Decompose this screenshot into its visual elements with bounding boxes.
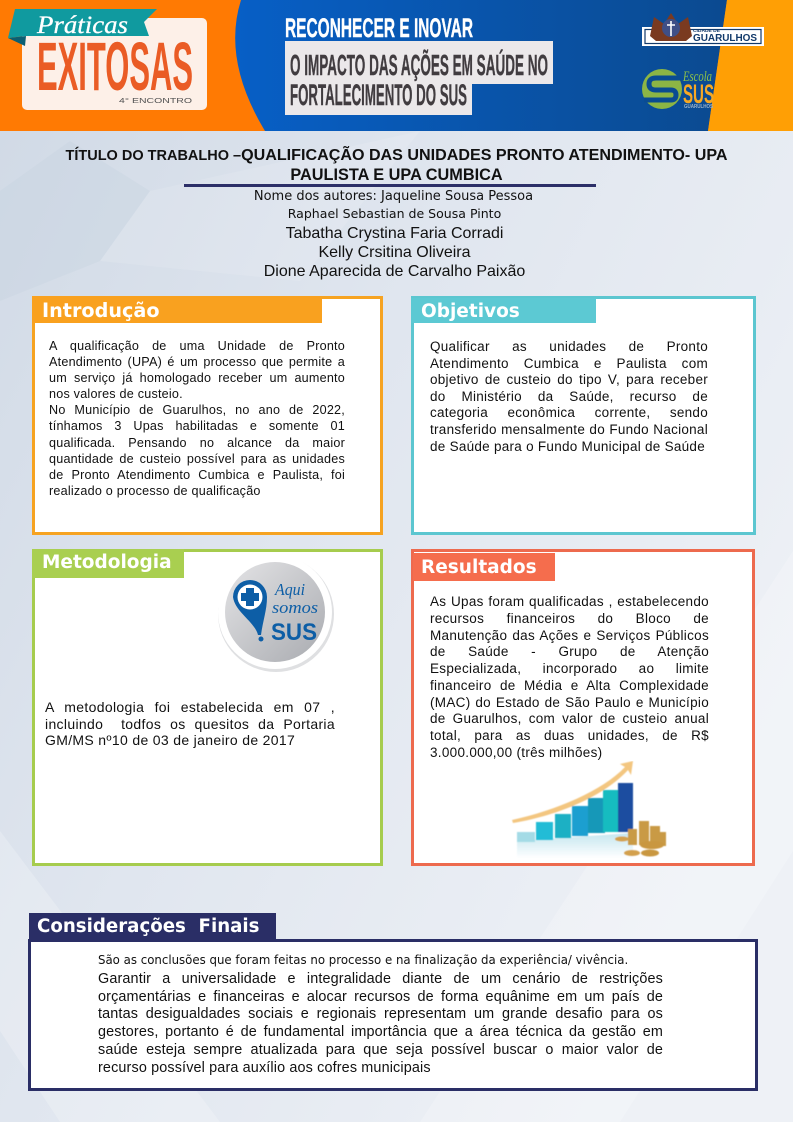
panel: objetivos [411, 296, 756, 535]
text: considerações finais: gestores, portanto é de fundamental importância que a área técnica da gestão em [98, 1024, 663, 1040]
text: resultados [430, 594, 709, 760]
text: considerações finais: São as conclusões que foram feitas no processo e na finalização da experiência/ vivência. [98, 952, 628, 967]
heading: objetivos [411, 298, 596, 323]
panel: introdução [32, 296, 383, 535]
text: resultados: 3.000.000,00 (três milhões) [430, 745, 602, 760]
text: introdução: de Pronto Atendimento Cumbica e Paulista, foi [49, 468, 345, 482]
title [65, 146, 728, 184]
event title [285, 13, 553, 115]
text: metodologia: incluindo todfos os quesitos da Portaria [45, 716, 335, 732]
icon: Aqui somos SUS: somos [272, 598, 318, 617]
logo: Práticas Exitosas [8, 9, 207, 110]
text: objetivos: Atendimento Cumbica e Paulista com [430, 356, 708, 371]
logo: Escola SUS: GUARULHOS [684, 104, 714, 110]
authors: Raphael Sebastian de Sousa Pinto [288, 207, 501, 222]
heading: resultados [413, 553, 555, 581]
text: introdução: Atendimento (UPA) é um processo que permite a [49, 355, 345, 369]
text: objetivos: do Ministério da Saúde, recurso de [430, 389, 708, 404]
text: metodologia [45, 699, 335, 748]
panel: resultados [411, 549, 755, 866]
text: introdução: realizado o processo de qualificação [49, 484, 261, 498]
text: considerações finais: orçamentárias e financeiras e alocar recursos de forma equânime em um país de [98, 989, 663, 1005]
text: resultados: As Upas foram qualificadas , estabelecendo [430, 594, 709, 609]
text: resultados: de Guarulhos, com valor de custeio anual [430, 711, 709, 726]
text: resultados: Especializada, incorporado ao limite [430, 661, 709, 676]
heading: metodologia: Metodologia [42, 552, 172, 573]
text: resultados: financeiro de Média e Alta Complexidade [430, 678, 709, 693]
text: introdução: A qualificação de uma Unidade de Pronto [49, 339, 345, 353]
logo: Práticas Exitosas: Práticas [36, 12, 128, 39]
title: TÍTULO DO TRABALHO –QUALIFICAÇÃO DAS UNIDADES PRONTO ATENDIMENTO- UPA [65, 146, 728, 164]
text: considerações finais: Garantir a universalidade e integralidade diante de um cenário de restrições [98, 971, 663, 987]
text: introdução: nos valores de custeio. [49, 387, 183, 401]
heading: introdução [32, 296, 322, 323]
event title: RECONHECER E INOVAR [285, 13, 473, 43]
logo: Escola SUS [642, 69, 714, 110]
text: metodologia: GM/MS nº10 de 03 de janeiro de 2017 [45, 732, 295, 748]
text: introdução: quantidade de custeio possível para as unidades [49, 452, 345, 466]
text: introdução: qualificada. Pensando no alcance da maior [49, 436, 345, 450]
text: objetivos: Qualificar as unidades de Pronto [430, 339, 708, 354]
heading: objetivos: Objetivos [421, 301, 520, 322]
text: resultados: total, para as duas unidades, de R$ [430, 728, 709, 743]
panel: considerações finais [28, 939, 758, 1091]
text: resultados: (MAC) do Estado de São Paulo e Município [430, 695, 709, 710]
text: objetivos: transferido mensalmente do Fundo Nacional [430, 422, 708, 437]
logo: Cidade de Guarulhos: CIDADE DE [693, 28, 720, 33]
heading: introdução: Introdução [42, 299, 160, 322]
text: resultados: Manutenção das Ações e Serviços Públicos [430, 628, 709, 643]
authors [254, 189, 533, 280]
heading: considerações finais: Considerações Finais [37, 916, 260, 937]
icon: Aqui somos SUS [218, 562, 334, 672]
logo: Cidade de Guarulhos: GUARULHOS [693, 32, 757, 44]
authors: Nome dos autores: Jaqueline Sousa Pessoa [254, 189, 533, 204]
header banner: EXITOSAS [37, 28, 193, 105]
header banner [0, 0, 793, 131]
logo: Práticas Exitosas: 4° ENCONTRO [119, 97, 193, 105]
text: objetivos: objetivo de custeio do tipo V, para receber [430, 372, 708, 387]
text: considerações finais [98, 952, 663, 1076]
logo: Escola SUS: Escola [682, 69, 712, 85]
icon: Aqui somos SUS: Aqui [274, 580, 305, 599]
title: PAULISTA E UPA CUMBICA [290, 166, 503, 184]
text: considerações finais: saúde esteja sempre atualizada para que seja possível buscar o maior valor de [98, 1042, 663, 1058]
text: objetivos: de Saúde para o Fundo Municipal de Saúde [430, 439, 705, 454]
text: metodologia: A metodologia foi estabelecida em 07 , [45, 699, 335, 715]
text: introdução: um serviço já homologado receber um aumento [49, 371, 345, 385]
text: introdução: tínhamos 3 Upas habilitadas e somente 01 [49, 419, 345, 433]
authors: Tabatha Crystina Faria Corradi [286, 225, 503, 242]
text: introdução [49, 339, 345, 498]
text: objetivos [430, 339, 708, 454]
text: objetivos: categoria econômica corrente, sendo [430, 405, 708, 420]
text: introdução: No Município de Guarulhos, no ano de 2022, [49, 403, 345, 417]
logo: Cidade de Guarulhos [642, 13, 764, 46]
text: considerações finais: recurso possível para auxílio aos cofres municipais [98, 1060, 431, 1076]
chart: growth bars with coins [512, 761, 667, 858]
event title: FORTALECIMENTO DO SUS [290, 79, 467, 112]
text: resultados: recursos financeiros do Bloco de [430, 611, 709, 626]
panel: metodologia [32, 549, 383, 866]
authors: Dione Aparecida de Carvalho Paixão [264, 263, 525, 280]
icon: Aqui somos SUS: SUS [271, 619, 317, 646]
text: resultados: de Saúde - Grupo de Atenção [430, 644, 709, 659]
heading: metodologia [32, 549, 184, 578]
authors: Kelly Crsitina Oliveira [318, 244, 471, 261]
heading: resultados: Resultados [421, 557, 537, 578]
logo: Escola SUS: SUS [683, 79, 714, 109]
text: considerações finais: tantas desigualdades sociais e regionais representam um grande desafio para os [98, 1006, 663, 1022]
